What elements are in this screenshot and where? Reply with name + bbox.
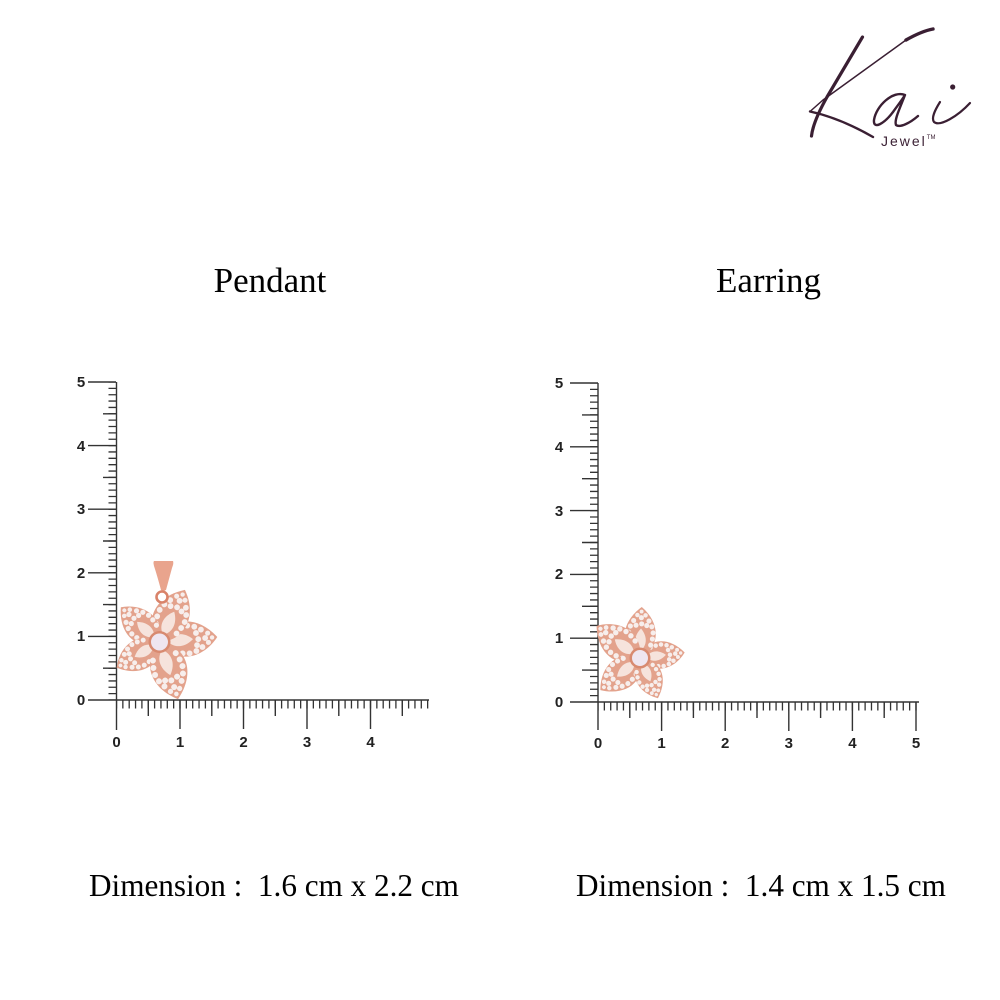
heading: Pendant: Pendant [214, 261, 327, 300]
horizontal axis [598, 702, 919, 731]
vertical axis numbers: 2 [555, 566, 563, 583]
logo: Kai Jewel [810, 29, 970, 149]
vertical axis numbers: 5 [555, 375, 563, 392]
vertical axis numbers: 2 [77, 565, 85, 582]
pendant flower photo [109, 561, 219, 704]
horizontal axis numbers: 3 [303, 734, 311, 751]
horizontal axis numbers: 0 [112, 734, 121, 751]
vertical axis numbers: 4 [555, 439, 564, 456]
vertical axis numbers: 1 [555, 630, 563, 647]
horizontal axis numbers [112, 734, 375, 751]
horizontal axis numbers: 1 [657, 735, 666, 752]
vertical axis numbers: 3 [77, 501, 85, 518]
vertical axis numbers [555, 375, 564, 711]
vertical axis numbers: 4 [77, 438, 86, 455]
vertical axis [570, 383, 919, 730]
horizontal axis numbers: 4 [366, 734, 375, 751]
horizontal axis numbers: 2 [721, 735, 729, 752]
pendant petals [109, 582, 219, 704]
horizontal axis numbers: 4 [848, 735, 857, 752]
vertical axis numbers: 0 [555, 694, 563, 711]
horizontal axis numbers: 2 [239, 734, 248, 751]
vertical axis [88, 382, 429, 730]
logo script: Kai [810, 29, 970, 137]
logo wordmark: Jewel [881, 133, 927, 149]
vertical axis numbers: 0 [77, 692, 85, 709]
earring dimension text: Dimension : 1.4 cm x 1.5 cm [576, 868, 946, 903]
logo wordmark: TM [927, 135, 935, 141]
horizontal axis [116, 700, 429, 729]
vertical axis numbers [77, 374, 86, 709]
pendant centre stone [148, 631, 170, 653]
pendant ruler chart [77, 374, 429, 751]
vertical axis numbers: 5 [77, 374, 85, 391]
earring flower photo [586, 606, 686, 703]
horizontal axis numbers [594, 735, 920, 752]
earring petals [586, 606, 686, 703]
earring ruler chart [555, 375, 920, 752]
horizontal axis numbers: 3 [785, 735, 793, 752]
vertical axis numbers: 1 [77, 628, 85, 645]
pendant bail [154, 561, 173, 602]
horizontal axis numbers: 1 [176, 734, 184, 751]
logo dot of i [950, 84, 955, 90]
vertical axis numbers: 3 [555, 503, 563, 520]
pendant dimension text: Dimension : 1.6 cm x 2.2 cm [89, 868, 459, 903]
heading: Earring: Earring [716, 261, 821, 300]
earring centre stone [630, 648, 650, 668]
horizontal axis numbers: 5 [912, 735, 920, 752]
horizontal axis numbers: 0 [594, 735, 602, 752]
